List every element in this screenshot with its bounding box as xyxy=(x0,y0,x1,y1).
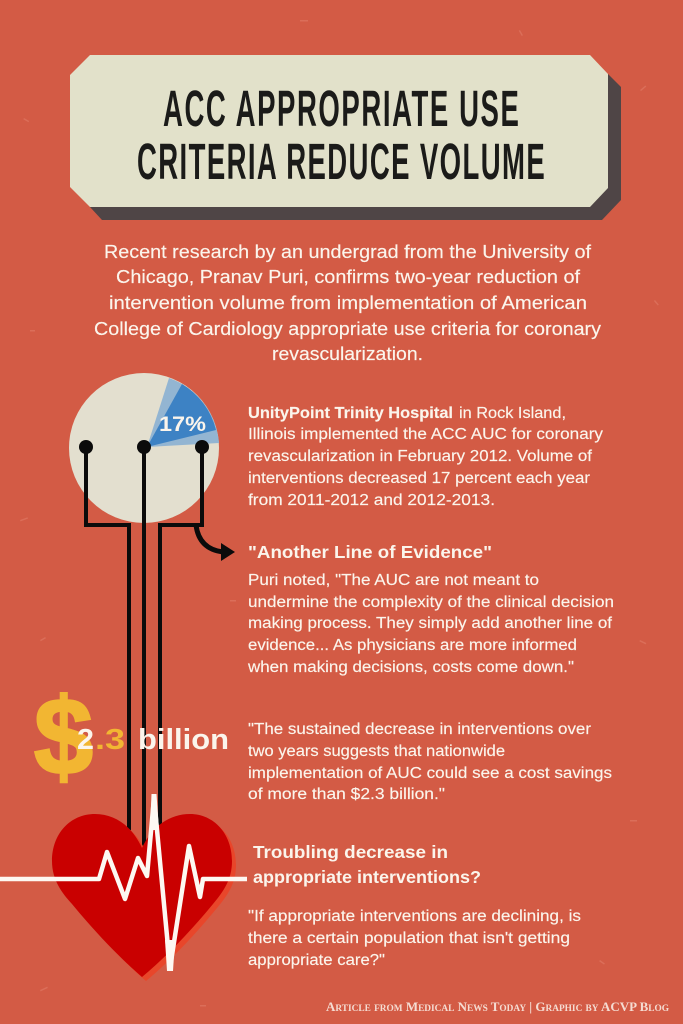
title banner: CRITERIA REDUCE VOLUME xyxy=(137,133,545,190)
closing quote: appropriate care?" xyxy=(248,952,385,969)
title banner: ACC APPROPRIATE USE xyxy=(163,80,519,137)
closing quote: there a certain population that isn't getting xyxy=(248,930,570,947)
Puri quote: evidence... As physicians are more informed xyxy=(248,637,577,654)
savings figure: 2.3 billion: billion xyxy=(138,724,229,756)
Puri quote: undermine the complexity of the clinical decision xyxy=(248,594,614,611)
Puri quote: making process. They simply add another line of xyxy=(248,615,613,632)
intro paragraph: intervention volume from implementation of American xyxy=(109,293,587,313)
icon: heart xyxy=(52,814,236,981)
hospital paragraph: from 2011-2012 and 2012-2013. xyxy=(248,492,495,509)
heading: troubling decrease: Troubling decrease in xyxy=(253,842,448,862)
hospital paragraph: revascularization in February 2012. Volume of xyxy=(248,448,593,465)
closing quote: "If appropriate interventions are declining, is xyxy=(248,908,581,925)
cost savings paragraph: two years suggests that nationwide xyxy=(248,743,505,760)
intro paragraph xyxy=(94,242,601,364)
hospital paragraph: Illinois implemented the ACC AUC for coronary xyxy=(248,426,603,443)
cost savings paragraph: of more than $2.3 billion." xyxy=(248,786,445,803)
Puri quote xyxy=(247,572,614,676)
Puri quote: when making decisions, costs come down." xyxy=(247,659,574,676)
cost savings paragraph: implementation of AUC could see a cost savings xyxy=(248,765,612,782)
heading: troubling decrease xyxy=(253,842,481,887)
cost savings paragraph xyxy=(248,721,612,803)
closing quote xyxy=(248,908,581,969)
connector wires to the heart xyxy=(79,440,209,850)
Puri quote: Puri noted, "The AUC are not meant to xyxy=(248,572,539,589)
pie chart: 17 percent xyxy=(69,373,219,523)
hospital paragraph: in Rock Island, xyxy=(459,405,566,422)
hospital paragraph xyxy=(248,405,603,509)
savings figure: 2.3 billion xyxy=(77,724,229,756)
heartbeat line xyxy=(0,794,247,971)
hospital paragraph: UnityPoint Trinity Hospital xyxy=(248,405,453,422)
pie chart: 17 percent: 17% xyxy=(159,413,206,436)
footer credit: Article from Medical News Today | Graphic by ACVP Blog xyxy=(326,1000,669,1014)
title banner xyxy=(70,55,621,220)
intro paragraph: College of Cardiology appropriate use criteria for coronary xyxy=(94,319,601,339)
intro paragraph: Chicago, Pranav Puri, confirms two-year reduction of xyxy=(116,267,581,287)
heading: troubling decrease: appropriate interventions? xyxy=(253,867,481,887)
savings figure: 2.3 billion: 2 xyxy=(77,724,94,756)
intro paragraph: revascularization. xyxy=(272,344,423,364)
savings figure: 2.3 billion: .3 xyxy=(95,724,125,756)
cost savings paragraph: "The sustained decrease in interventions over xyxy=(248,721,591,738)
intro paragraph: Recent research by an undergrad from the University of xyxy=(104,242,592,262)
arrow to evidence section xyxy=(196,525,235,561)
hospital paragraph: interventions decreased 17 percent each year xyxy=(248,470,590,487)
heading: another line of evidence: "Another Line of Evidence" xyxy=(248,542,492,562)
icon: dollar sign: $ xyxy=(34,676,93,798)
